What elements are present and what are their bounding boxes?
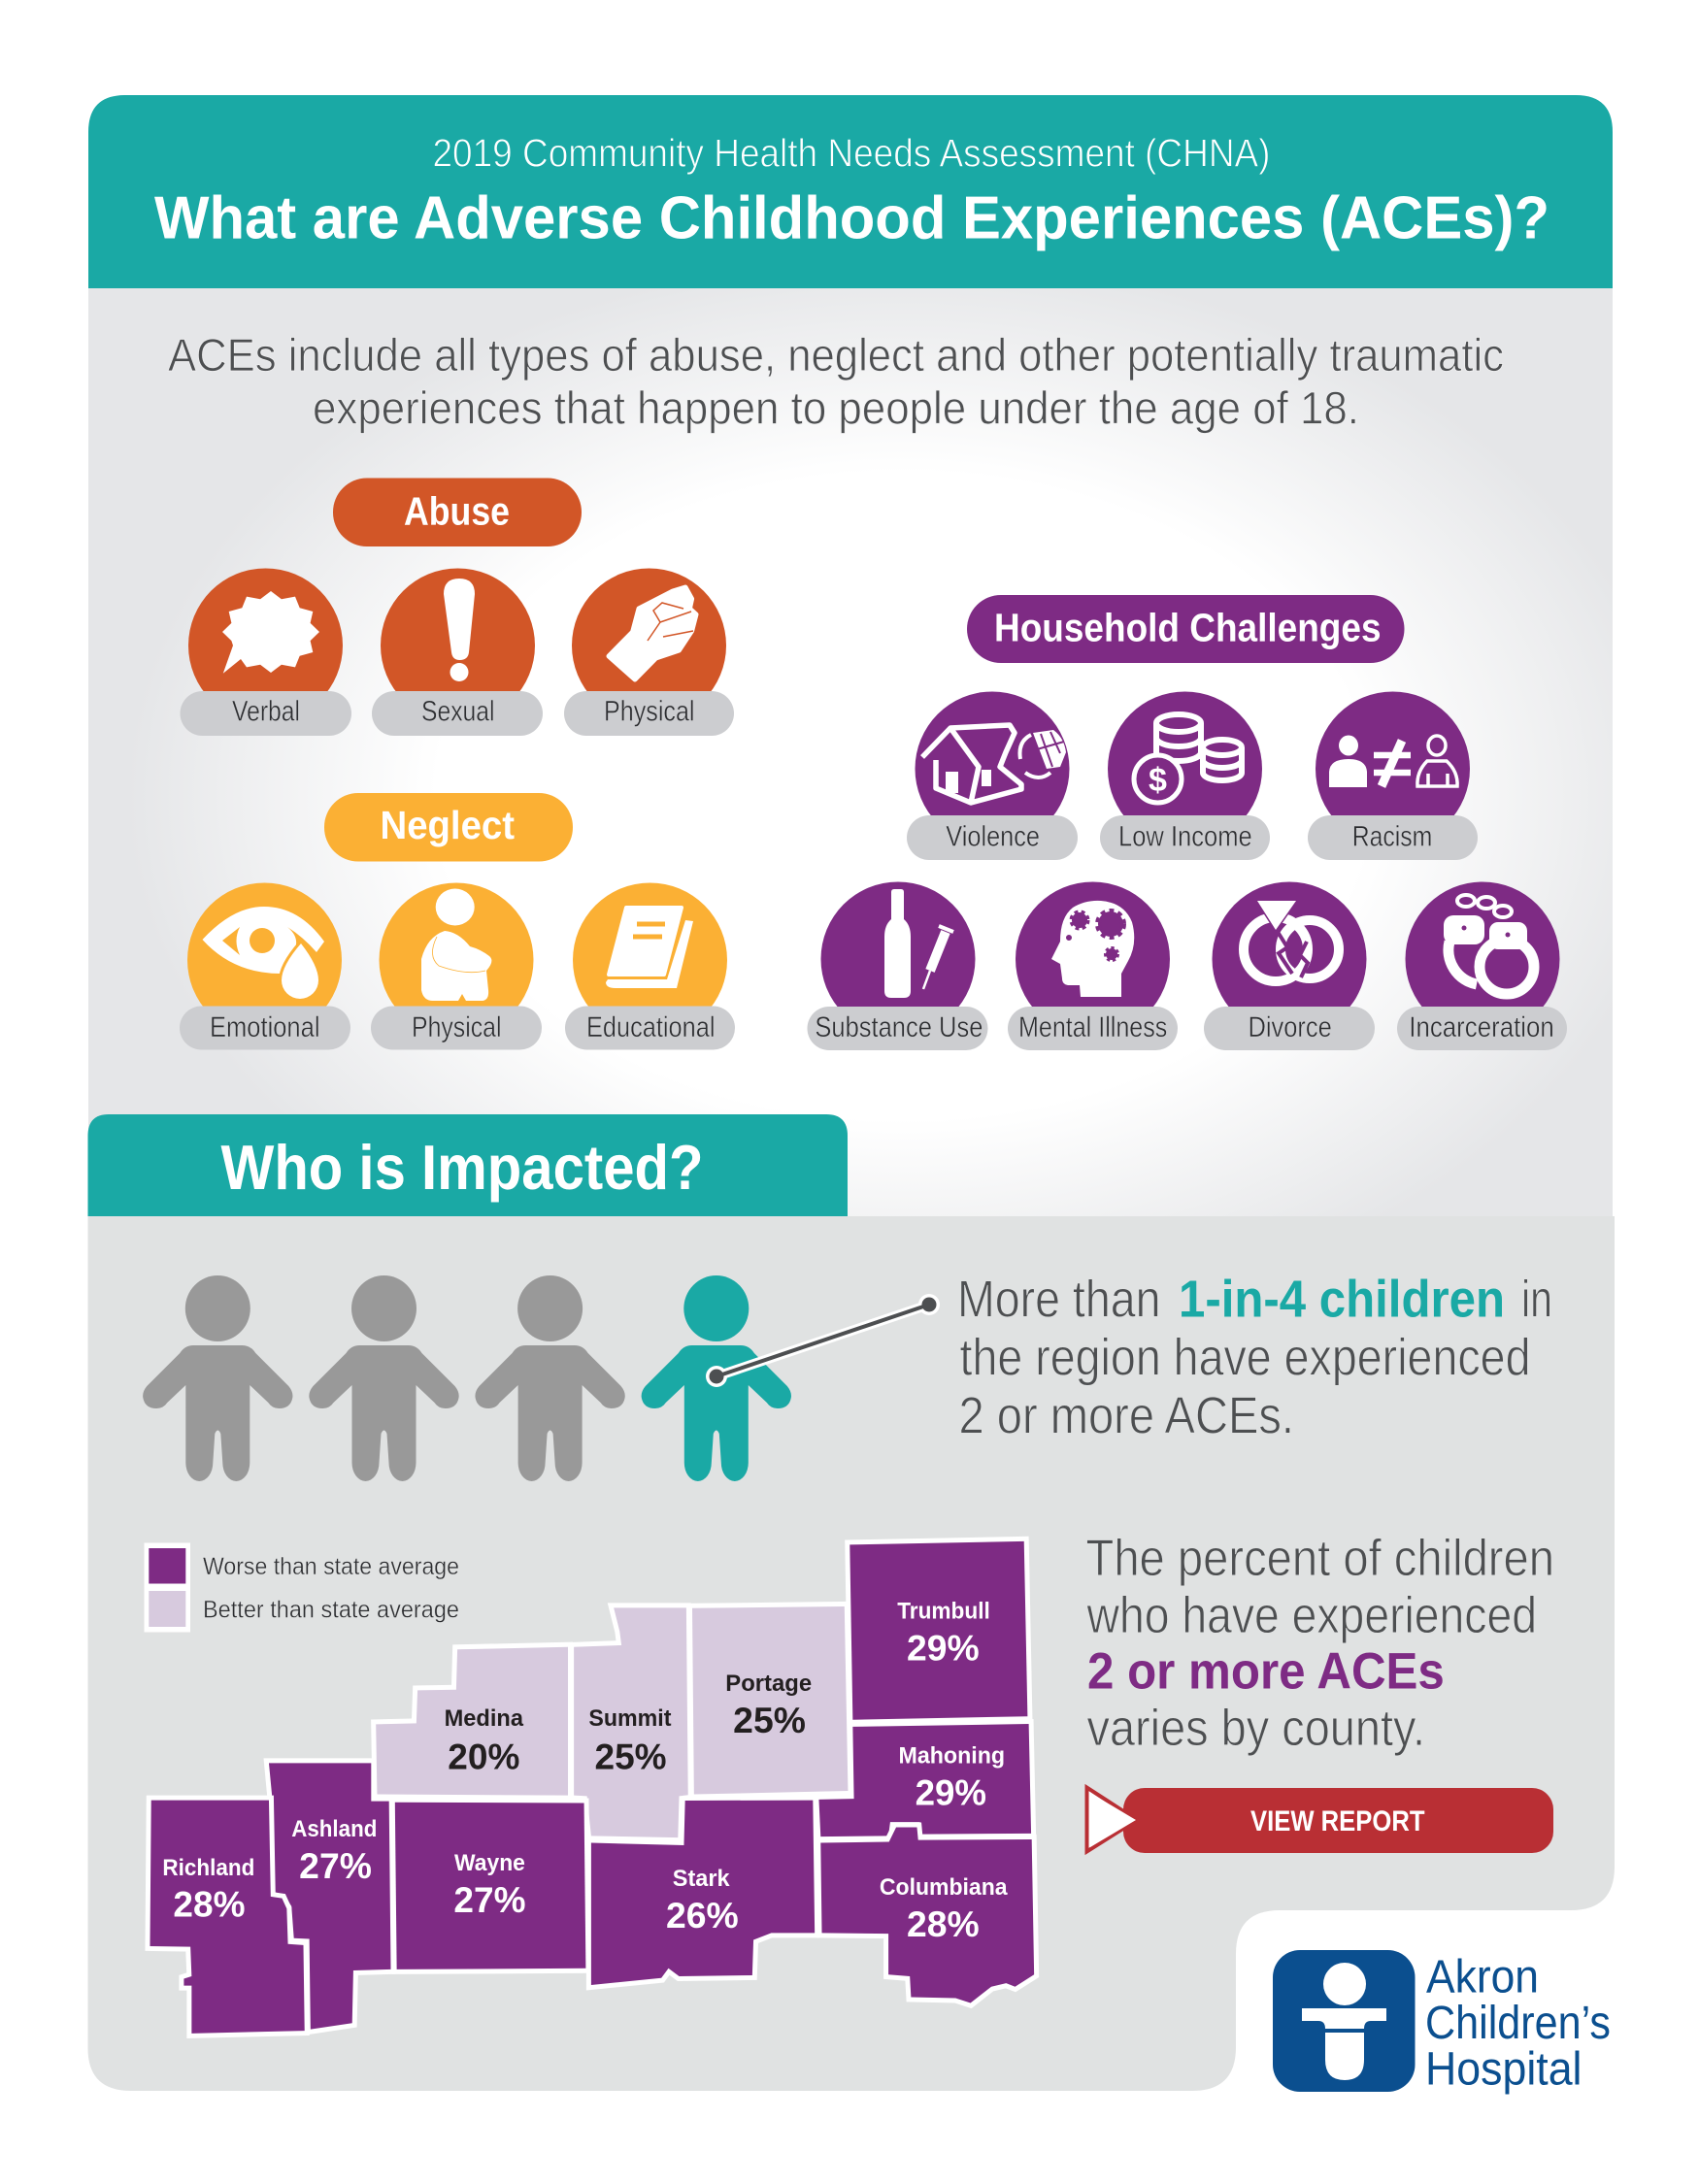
heading: who is impacted: Who is Impacted?	[221, 1132, 703, 1203]
logo mark	[1273, 1950, 1416, 2092]
county: Richland	[150, 1801, 305, 2034]
logo wordmark: Akron	[1426, 1951, 1539, 2003]
icon: educational: Educational	[586, 1011, 715, 1043]
legend: worse	[149, 1548, 459, 1584]
heading: who is impacted	[87, 1114, 848, 1216]
icon: mental illness	[1008, 881, 1178, 1050]
county: Ashland	[269, 1763, 391, 2030]
icon: physical abuse: Physical	[604, 695, 695, 728]
icon: sexual	[372, 569, 543, 736]
callout: 1-in-4 children: the region have experienced	[959, 1328, 1530, 1386]
icon: emotional: Emotional	[210, 1011, 320, 1043]
panel: who is impacted	[87, 1216, 1615, 2091]
county: Medina: Medina	[445, 1705, 524, 1732]
icon: violence	[907, 691, 1078, 860]
logo: Akron Children's Hospital	[1273, 1950, 1611, 2095]
intro text: ACEs include all types of abuse, neglect and other potentially traumatic	[168, 329, 1504, 381]
county: Ashland: 27%	[299, 1846, 372, 1886]
legend: better: Better than state average	[203, 1596, 459, 1623]
county map	[150, 1541, 1034, 2034]
icon: physical neglect: Physical	[412, 1011, 501, 1043]
icon: divorce: Divorce	[1249, 1011, 1332, 1043]
icon: racism: Racism	[1352, 821, 1432, 852]
heading: neglect: Neglect	[381, 803, 515, 847]
county: Trumbull	[850, 1541, 1027, 1720]
county: Medina: 20%	[448, 1737, 519, 1776]
county: Wayne: Wayne	[454, 1850, 525, 1876]
callout: 1-in-4 children: 1-in-4 children	[1179, 1270, 1505, 1328]
callout: 1-in-4 children: 2 or more ACEs.	[959, 1386, 1294, 1444]
icon: incarceration: Incarceration	[1409, 1011, 1554, 1043]
county: Mahoning	[818, 1724, 1031, 1837]
county: Summit	[574, 1607, 688, 1837]
icon: violence: Violence	[946, 821, 1040, 852]
icon: substance use	[808, 881, 988, 1050]
icon: mental illness: Mental Illness	[1018, 1011, 1167, 1043]
heading: neglect	[324, 793, 573, 862]
heading: household challenges	[967, 595, 1404, 663]
panel: abuse	[181, 478, 734, 736]
county: Trumbull: 29%	[907, 1628, 980, 1668]
county: Summit: Summit	[588, 1705, 672, 1732]
logo wordmark: Children’s	[1425, 1998, 1611, 2049]
county: Portage	[692, 1606, 848, 1795]
county: Medina	[376, 1647, 568, 1796]
text: county variation: 2 or more ACEs	[1087, 1642, 1445, 1701]
icon: physical abuse	[564, 569, 734, 736]
heading: abuse: Abuse	[404, 489, 510, 534]
legend: worse: Worse than state average	[203, 1553, 459, 1580]
county: Mahoning: Mahoning	[899, 1742, 1005, 1769]
intro text: experiences that happen to people under the age of 18.	[313, 382, 1359, 433]
county: Stark: 26%	[666, 1896, 739, 1936]
heading: household challenges: Household Challenges	[994, 606, 1381, 650]
text: county variation: The percent of children	[1085, 1530, 1554, 1587]
people pictogram: 1 in 4	[143, 1275, 791, 1481]
icon: educational	[565, 883, 735, 1050]
icon: low income: $	[1149, 762, 1167, 799]
icon: incarceration	[1397, 881, 1567, 1050]
text: county variation: varies by county.	[1087, 1700, 1425, 1757]
person 1	[143, 1275, 292, 1481]
icon: physical neglect	[371, 883, 542, 1050]
logo wordmark: Hospital	[1425, 2044, 1582, 2095]
icon: divorce	[1204, 881, 1375, 1050]
icon: low income	[1100, 691, 1270, 860]
map legend	[144, 1543, 459, 1633]
county: Columbiana: 28%	[907, 1904, 980, 1944]
icon: verbal	[181, 569, 351, 736]
icon: substance use: Substance Use	[815, 1011, 983, 1043]
button: view report	[1087, 1788, 1553, 1853]
county: Wayne: 27%	[453, 1880, 526, 1920]
icon: racism	[1308, 691, 1478, 860]
panel: definitions background	[88, 288, 1613, 1220]
county: Richland: Richland	[162, 1855, 254, 1881]
callout pointer line	[706, 1294, 940, 1387]
button: view report: VIEW REPORT	[1250, 1805, 1425, 1837]
county: Portage: 25%	[733, 1701, 806, 1740]
county: Stark	[591, 1801, 815, 1985]
panel: neglect	[180, 793, 735, 1050]
header banner	[88, 95, 1613, 288]
person 2	[309, 1275, 459, 1481]
subtitle: 2019 Community Health Needs Assessment (CHNA)	[433, 130, 1270, 175]
person 3	[475, 1275, 625, 1481]
intro text	[168, 329, 1504, 433]
callout: 1-in-4 children	[957, 1270, 1552, 1444]
icon: emotional	[180, 883, 350, 1050]
legend: better	[149, 1591, 459, 1627]
icon: verbal: Verbal	[232, 695, 300, 728]
county: Richland: 28%	[173, 1885, 245, 1925]
callout: 1-in-4 children: in	[1521, 1270, 1552, 1328]
county: Columbiana	[820, 1827, 1034, 2003]
heading: abuse	[333, 478, 582, 546]
icon: sexual: Sexual	[421, 695, 495, 728]
text: county variation: who have experienced	[1086, 1587, 1537, 1644]
panel: household challenges	[808, 595, 1567, 1050]
icon: low income: Low Income	[1118, 821, 1252, 852]
county: Ashland: Ashland	[291, 1816, 377, 1842]
callout: 1-in-4 children: More than	[957, 1270, 1161, 1328]
county: Trumbull: Trumbull	[897, 1598, 990, 1625]
title: What are Adverse Childhood Experiences (ACEs)?	[154, 184, 1549, 252]
logo wordmark	[1425, 1951, 1611, 2095]
county: Portage: Portage	[725, 1671, 812, 1697]
county: Summit: 25%	[594, 1737, 667, 1776]
county: Mahoning: 29%	[916, 1772, 986, 1812]
person 4 highlighted	[642, 1275, 791, 1481]
text: county variation	[1085, 1530, 1554, 1757]
county: Wayne	[395, 1803, 585, 1969]
county: Columbiana: Columbiana	[880, 1874, 1008, 1901]
county: Stark: Stark	[673, 1866, 730, 1892]
